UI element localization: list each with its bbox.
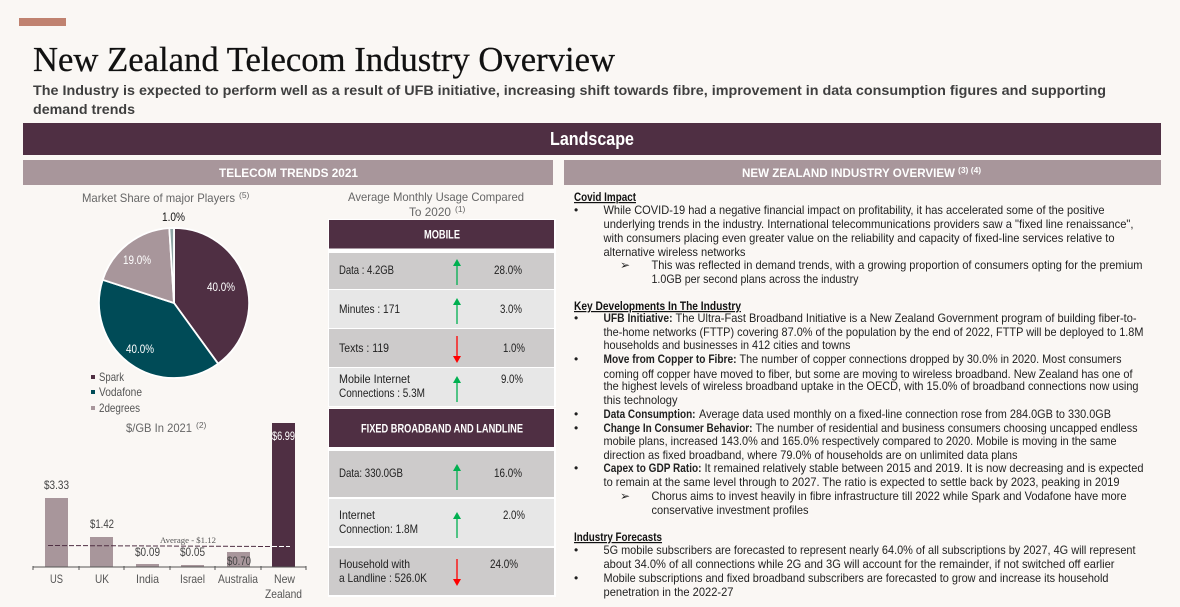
section: key developments	[574, 299, 1144, 517]
table: mobile	[328, 219, 556, 407]
section: covid impact: While COVID-19 had a negative financial impact on profitability, it has accelerated some of the positive	[604, 203, 1105, 217]
table: fixed broadband and landline	[328, 408, 556, 597]
row: mobile internet	[329, 368, 554, 406]
row: texts	[329, 329, 554, 367]
row: texts: Texts : 119	[339, 341, 389, 355]
section: covid impact: Covid Impact	[574, 190, 636, 204]
header: industry overview: NEW ZEALAND INDUSTRY OVERVIEW	[742, 166, 956, 180]
section: key developments: the-home networks (FTTP) covering 87.0% of the population by the end of 2022, FTTP will be deployed to 1.8M	[604, 325, 1144, 339]
section: industry forecasts	[574, 530, 1136, 599]
section: key developments: •	[574, 311, 578, 325]
subtitle: The Industry is expected to perform well as a result of UFB initiative, increasing shift towards fibre, improvement in data consumption figures and supporting	[33, 82, 1106, 98]
row: household landline	[329, 548, 554, 595]
chart title: price per GB: $/GB In 2021	[126, 421, 192, 435]
bar chart: price per GB: Average - $1.12	[160, 536, 216, 545]
row: internet connection: Connection: 1.8M	[339, 522, 418, 536]
row: fixed data: 16.0%	[494, 466, 522, 480]
section: key developments: Move from Copper to Fibre:	[604, 352, 736, 366]
subtitle: demand trends	[33, 101, 135, 117]
section: industry forecasts: •	[574, 571, 578, 585]
section: covid impact: ➢	[620, 258, 630, 272]
section: industry forecasts: 5G mobile subscribers are forecasted to represent nearly 64.0% of all subscriptions by 2027, 4G will represent	[604, 543, 1136, 557]
section: key developments: coming off copper have moved to fiber, but some are moving to wireless broadband. New Zealand has one of	[604, 367, 1133, 381]
header: industry overview: (3) (4)	[958, 165, 981, 175]
section: covid impact: 1.0GB per second plans across the industry	[652, 272, 858, 286]
panel: telecom trends	[23, 160, 556, 601]
bar chart: price per GB: $1.42	[90, 517, 114, 531]
section: key developments: to remain at the same level through to 2027. The ratio is expected to settle back by 2023, peaking in 2019	[604, 475, 1120, 489]
header: industry overview	[564, 160, 1161, 185]
section: industry forecasts: •	[574, 543, 578, 557]
row: minutes: Minutes : 171	[339, 302, 400, 316]
section: industry forecasts: Industry Forecasts	[574, 530, 662, 544]
banner: Landscape	[23, 123, 1161, 155]
section: key developments: The number of copper connections dropped by 30.0% in 2020. Most consumers	[740, 352, 1122, 366]
bar chart: price per GB: $3.33	[44, 478, 69, 492]
row: mobile data: Data : 4.2GB	[339, 263, 394, 277]
section: key developments: Data Consumption:	[604, 407, 696, 421]
bar chart: price per GB: Australia	[218, 572, 258, 586]
section: key developments: Chorus aims to invest heavily in fibre infrastructure till 2022 while Spark and Vodafone have more	[652, 489, 1127, 503]
row: mobile internet: 9.0%	[501, 372, 523, 386]
section: industry forecasts: about 34.0% of all connections while 2G and 3G will account for the remainder, if not switched off earlier	[604, 557, 1115, 571]
subtitle	[33, 82, 1106, 117]
section: key developments: this technology	[604, 393, 678, 407]
pie legend: Spark	[99, 370, 125, 384]
pie legend	[91, 370, 142, 415]
section: key developments: •	[574, 407, 578, 421]
section: key developments: Capex to GDP Ratio:	[604, 461, 702, 475]
section: key developments: Key Developments In The Industry	[574, 299, 741, 313]
section: key developments: conservative investment profiles	[652, 503, 808, 517]
section: key developments: Change In Consumer Behavior:	[604, 421, 752, 435]
header: telecom trends: TELECOM TRENDS 2021	[219, 166, 358, 180]
row: household landline: Household with	[339, 557, 410, 571]
row: internet connection: 2.0%	[503, 508, 525, 522]
section: covid impact: alternative wireless networks	[604, 245, 746, 259]
section: key developments: The number of residential and business consumers choosing uncapped endless	[756, 421, 1138, 435]
pie chart: market share: 19.0%	[123, 253, 151, 267]
section: industry forecasts: Mobile subscriptions and fixed broadband subscribers are forecasted to grow and increase its household	[604, 571, 1108, 585]
section: key developments: •	[574, 461, 578, 475]
pie legend: 2degrees	[99, 401, 140, 415]
bar chart: price per GB: $6.99	[272, 429, 295, 443]
panel: industry overview	[564, 160, 1161, 599]
pie chart: market share: 1.0%	[162, 210, 185, 224]
table: mobile: MOBILE	[424, 230, 460, 242]
bar chart: price per GB: $0.09	[135, 545, 160, 559]
chart title: market share: (5)	[239, 190, 250, 200]
title: New Zealand Telecom Industry Overview	[33, 40, 616, 79]
bar chart: price per GB: Zealand	[265, 587, 302, 601]
banner: Landscape: Landscape	[550, 129, 634, 149]
header: telecom trends	[23, 160, 553, 185]
section: industry forecasts: penetration in the 2022-27	[604, 585, 734, 599]
row: mobile internet: Mobile Internet	[339, 372, 411, 386]
section: key developments: mobile plans, increased 143.0% and 165.0% respectively compared to 2020. Mobile is moving in the same	[604, 434, 1117, 448]
bar chart: price per GB	[33, 423, 306, 601]
section: covid impact: This was reflected in demand trends, with a growing proportion of consumers opting for the premium	[652, 258, 1142, 272]
row: internet connection	[329, 499, 554, 546]
row: texts: 1.0%	[503, 341, 525, 355]
section: key developments: the highest levels of wireless broadband uptake in the OECD, with 15.0% of broadband connections now using	[604, 379, 1138, 393]
row: household landline: 24.0%	[490, 557, 518, 571]
section: key developments: UFB Initiative:	[604, 311, 672, 325]
chart title: market share: Market Share of major Players	[82, 191, 235, 205]
row: minutes	[329, 290, 554, 328]
chart title: monthly usage: Average Monthly Usage Compared	[348, 190, 524, 204]
bar chart: price per GB: $0.70	[227, 554, 251, 568]
row: fixed data	[329, 451, 554, 497]
section: key developments: The Ultra-Fast Broadband Initiative is a New Zealand Government program of building fiber-to-	[676, 311, 1136, 325]
chart title: monthly usage: (1)	[455, 204, 466, 214]
section: key developments: It remained relatively stable between 2015 and 2019. It is now decreasing and is expected	[704, 461, 1144, 475]
section: key developments: households and businesses in 412 cities and towns	[604, 338, 850, 352]
chart title: monthly usage	[348, 190, 524, 219]
row: household landline: a Landline : 526.0K	[339, 571, 427, 585]
section: covid impact: with consumers placing even greater value on the reliability and capacity of fixed-line services relative to	[603, 231, 1115, 245]
table: fixed broadband and landline: FIXED BROADBAND AND LANDLINE	[361, 424, 523, 436]
section: key developments: •	[574, 352, 578, 366]
row: minutes: 3.0%	[500, 302, 522, 316]
bar chart: price per GB: $0.05	[180, 545, 205, 559]
section: covid impact: underlying trends in the industry. International telecommunications providers saw a "fixed line renaissance",	[604, 217, 1134, 231]
section: covid impact: •	[574, 203, 578, 217]
section: key developments: •	[574, 421, 578, 435]
bar chart: price per GB: US	[50, 572, 63, 586]
pie chart: market share	[99, 210, 249, 378]
row: internet connection: Internet	[339, 508, 376, 522]
bar chart: price per GB: New	[274, 572, 295, 586]
row: mobile data	[329, 253, 554, 289]
row: mobile internet: Connections : 5.3M	[339, 386, 425, 400]
section: key developments: Average data used monthly on a fixed-line connection rose from 284.0GB to 330.0GB	[699, 407, 1111, 421]
section: covid impact	[574, 190, 1142, 286]
section: key developments: ➢	[620, 489, 630, 503]
pie chart: market share: 40.0%	[207, 280, 235, 294]
pie chart: market share: 40.0%	[126, 342, 154, 356]
row: mobile data: 28.0%	[494, 263, 522, 277]
row: fixed data: Data: 330.0GB	[339, 466, 403, 480]
bar chart: price per GB: UK	[95, 572, 109, 586]
accent bar	[19, 18, 66, 26]
pie legend: Vodafone	[99, 385, 142, 399]
bar chart: price per GB: Israel	[180, 572, 205, 586]
section: key developments: direction as fixed broadband, where 79.0% of households are on unlimited data plans	[604, 448, 1018, 462]
bar chart: price per GB: India	[136, 572, 159, 586]
chart title: monthly usage: To 2020	[409, 205, 451, 219]
chart title: price per GB: (2)	[196, 420, 207, 430]
